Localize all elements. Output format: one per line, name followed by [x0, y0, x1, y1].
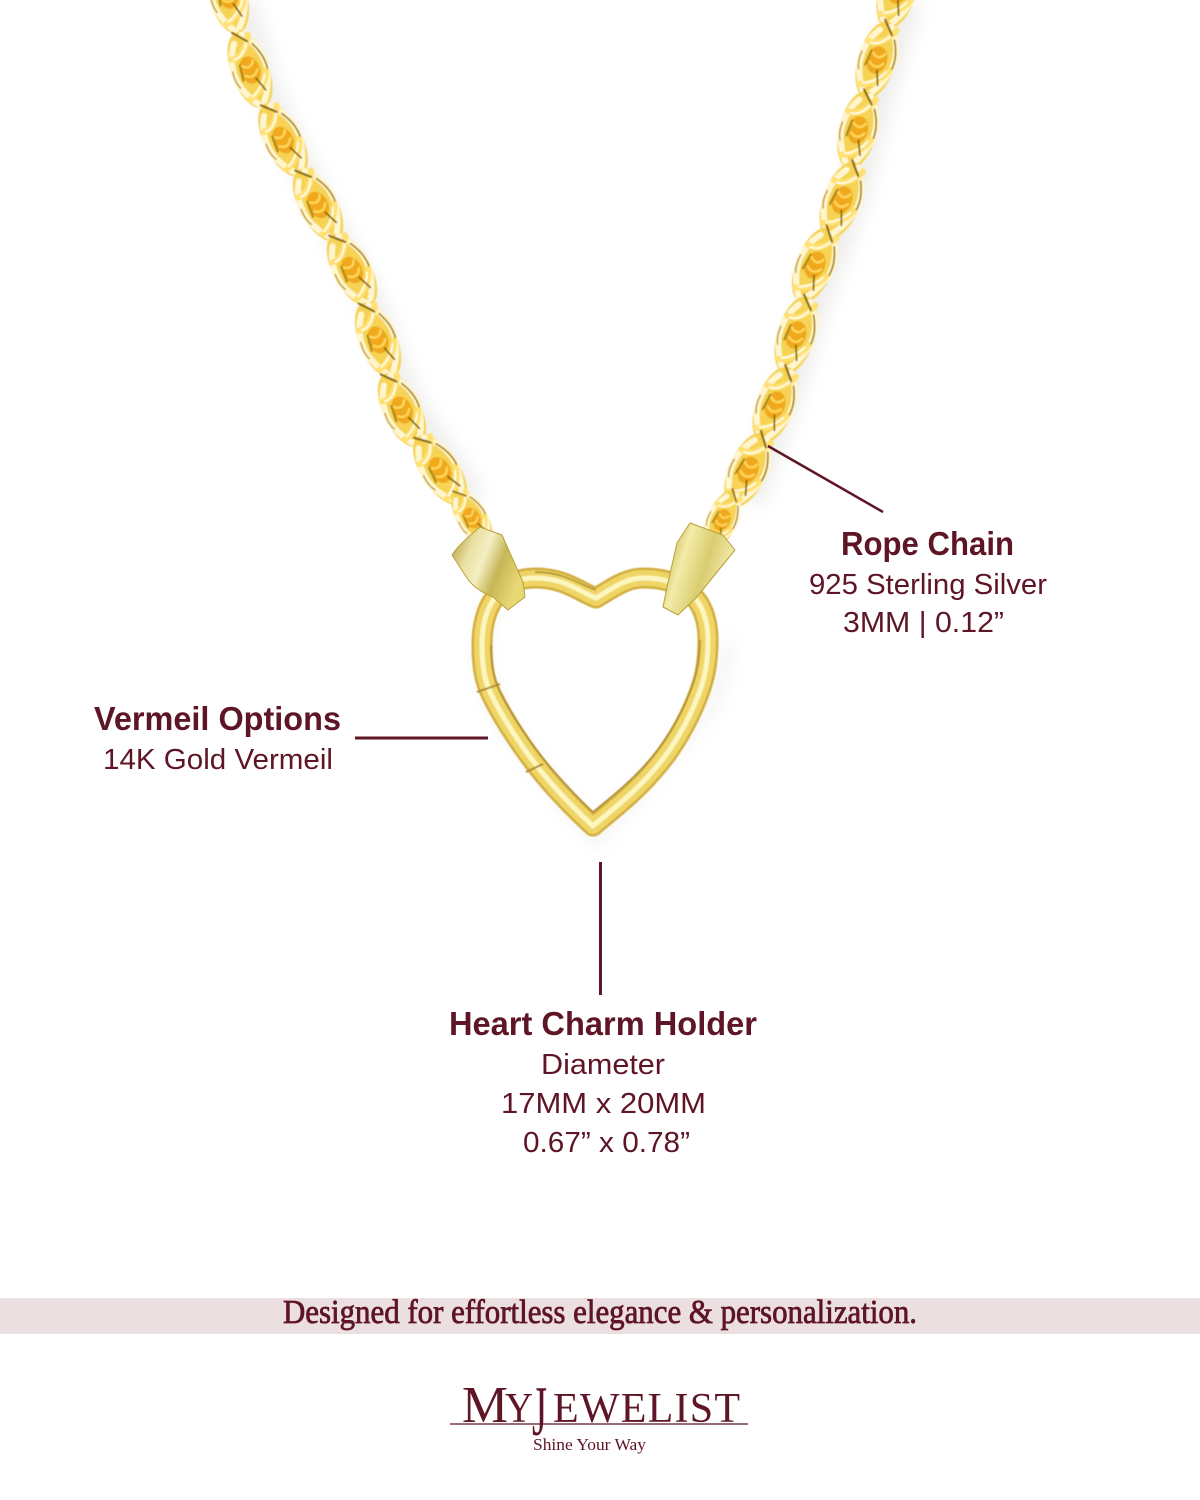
left bail cap: [452, 527, 525, 610]
logo: EWELIST: [553, 1386, 740, 1432]
callout line: rope chain: [768, 446, 883, 512]
heart charm holder: [477, 572, 708, 826]
logo: J: [532, 1373, 547, 1451]
callout text: rope chain: [809, 525, 1047, 639]
callout text: vermeil options: Vermeil Options: [94, 700, 341, 737]
callout line: vermeil options: [355, 736, 488, 740]
rope chain: right strand: [695, 0, 928, 555]
right bail cap: [663, 523, 735, 615]
callout text: rope chain: 925 Sterling Silver: [809, 569, 1047, 601]
callout text: vermeil options: [94, 700, 341, 776]
callout text: rope chain: Rope Chain: [841, 525, 1014, 562]
logo: Shine Your Way: [533, 1435, 646, 1454]
tagline band: Designed for effortless elegance & personalization.: [283, 1294, 917, 1331]
chain shadow: [242, 0, 908, 840]
callout text: heart charm holder: Diameter: [541, 1049, 665, 1081]
callout text: rope chain: 3MM | 0.12”: [843, 607, 1004, 639]
callout text: heart charm holder: 17MM x 20MM: [501, 1088, 706, 1120]
logo: Y: [505, 1386, 533, 1432]
logo: M: [462, 1377, 508, 1434]
callout text: heart charm holder: 0.67” x 0.78”: [523, 1127, 690, 1159]
callout text: vermeil options: 14K Gold Vermeil: [103, 744, 333, 776]
tagline band: [0, 1294, 1200, 1334]
callout text: heart charm holder: Heart Charm Holder: [449, 1005, 757, 1042]
callout line: heart charm holder: [599, 862, 602, 995]
rope chain: left strand: [199, 0, 501, 553]
logo: [450, 1373, 748, 1454]
callout text: heart charm holder: [449, 1005, 757, 1159]
